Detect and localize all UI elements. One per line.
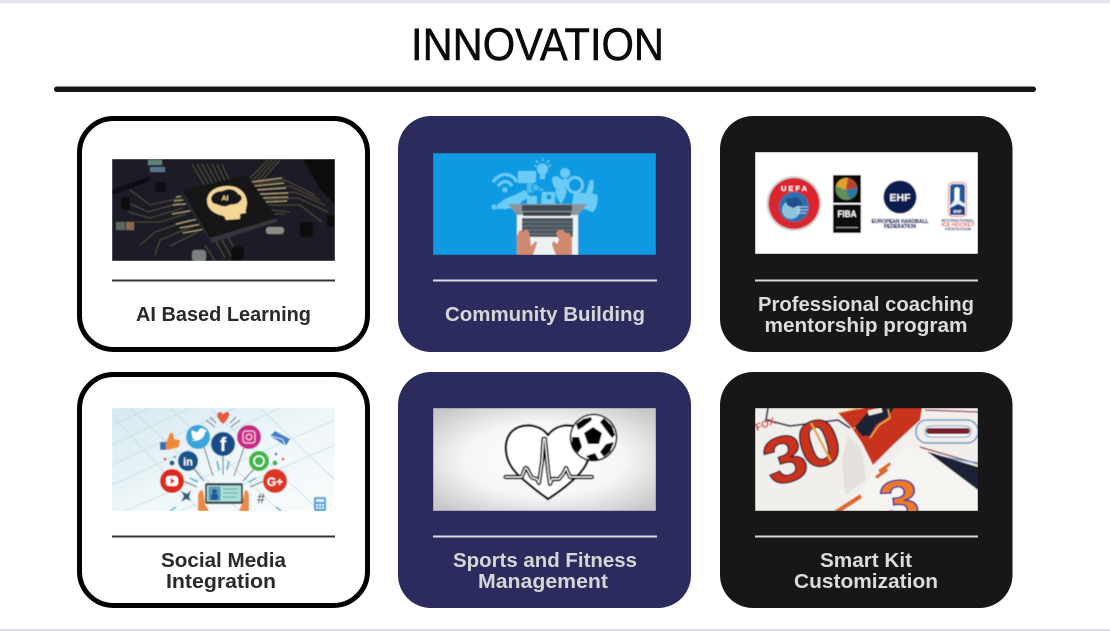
jersey number 30 — [762, 418, 840, 484]
label: Community Building — [445, 304, 645, 326]
card background — [720, 116, 1012, 352]
label: Social Media — [161, 550, 287, 572]
title: INNOVATION — [411, 19, 664, 70]
image: sports jerseys — [755, 408, 978, 511]
label: mentorship program — [764, 315, 968, 337]
image: federation logos: FEDERATION — [884, 224, 916, 230]
panel: Social Media Integration — [80, 374, 368, 606]
divider — [112, 280, 335, 282]
image: social media icons around tablet: f — [220, 435, 227, 456]
image: heart with pulse and football — [433, 408, 656, 511]
image: federation logos: FEDERATION — [945, 226, 971, 232]
image: AI chip on circuit board: AI — [222, 196, 229, 202]
image: social media icons around tablet: in — [183, 456, 193, 468]
jersey number 30: 3 — [754, 419, 817, 502]
label: AI Based Learning — [136, 304, 311, 326]
label: Sports and Fitness — [453, 550, 637, 572]
image: social media icons around tablet — [112, 408, 335, 511]
divider — [755, 280, 978, 282]
image: AI chip on circuit board — [112, 159, 335, 261]
label: Integration — [166, 571, 276, 593]
top window edge — [0, 0, 1110, 4]
image: social media icons around tablet: # — [257, 490, 265, 506]
image: federation logos: EHF — [890, 193, 910, 204]
label: Management — [478, 571, 608, 593]
panel: Community Building — [398, 116, 691, 352]
divider — [755, 536, 978, 538]
image: federation logos: INTERNATIONAL — [942, 218, 975, 223]
image: federation logos: EUROPEAN HANDBALL — [872, 219, 929, 225]
jersey number 3: 3 — [876, 467, 923, 537]
image: laptop with social icons — [433, 153, 656, 255]
left white jersey folds — [755, 408, 873, 511]
card background — [80, 118, 368, 350]
image: federation logos: ICE HOCKEY — [942, 222, 975, 228]
label: Customization — [794, 571, 938, 593]
striped white jersey — [893, 408, 978, 470]
image: social media icons around tablet: G+ — [267, 475, 283, 489]
image: federation logos: IIHF — [953, 209, 962, 214]
panel: Smart Kit Customization — [720, 372, 1012, 608]
divider — [433, 536, 657, 538]
image: federation logos: FIBA — [838, 209, 857, 219]
divider — [433, 280, 657, 282]
card background — [720, 372, 1012, 608]
card background — [398, 372, 691, 608]
bottom window edge — [0, 629, 1110, 631]
title rule — [54, 86, 1036, 92]
card background — [398, 116, 691, 352]
card background — [80, 374, 368, 606]
panel: Professional coaching mentorship program — [720, 116, 1012, 352]
bottom white jersey — [912, 448, 978, 492]
jersey number 30: 0 — [788, 403, 851, 486]
divider — [112, 536, 335, 538]
image: federation logos — [755, 152, 978, 254]
image: federation logos: UEFA — [781, 184, 808, 193]
panel: Sports and Fitness Management — [398, 372, 691, 608]
red jersey — [838, 408, 922, 465]
image: sports jerseys: FOX — [754, 416, 777, 434]
panel: AI Based Learning — [80, 118, 368, 350]
label: Professional coaching — [758, 294, 974, 316]
label: Smart Kit — [820, 550, 912, 572]
